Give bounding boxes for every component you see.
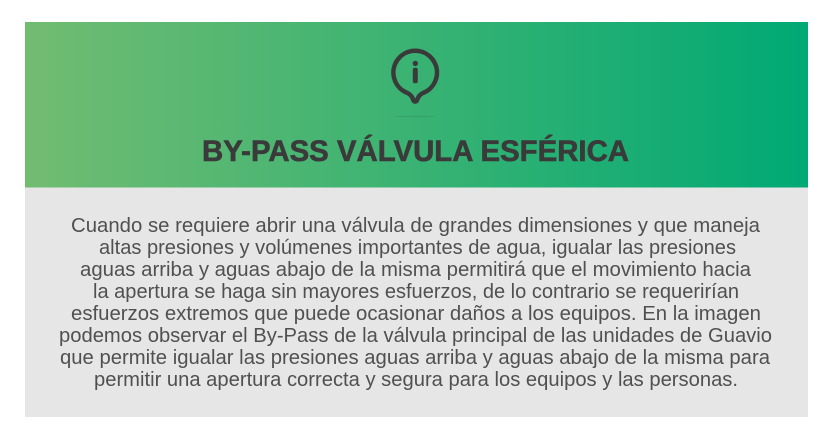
text block: description: permitir una apertura correcta y segura para los equipos y las personas. bbox=[94, 368, 738, 391]
text block: description: aguas arriba y aguas abajo de la misma permitirá que el movimiento hacia bbox=[80, 258, 752, 281]
text block: description bbox=[59, 214, 772, 391]
text block: description: Cuando se requiere abrir una válvula de grandes dimensiones y que maneja bbox=[71, 214, 761, 237]
title: BY-PASS VÁLVULA ESFÉRICA bbox=[202, 134, 629, 168]
text block: description: que permite igualar las presiones aguas arriba y aguas abajo de la misma para bbox=[60, 346, 771, 369]
text block: description: podemos observar el By-Pass de la válvula principal de las unidades de Guavio bbox=[59, 324, 772, 347]
text block: description: esfuerzos extremos que puede ocasionar daños a los equipos. En la imagen bbox=[71, 302, 761, 325]
panel: grey body bbox=[25, 188, 808, 417]
panel: green header bbox=[25, 22, 808, 188]
text block: description: la apertura se haga sin mayores esfuerzos, de lo contrario se requerirían bbox=[93, 280, 739, 303]
text block: description: altas presiones y volúmenes importantes de agua, igualar las presiones bbox=[99, 236, 736, 259]
icon: information speech bubble bbox=[393, 51, 437, 117]
